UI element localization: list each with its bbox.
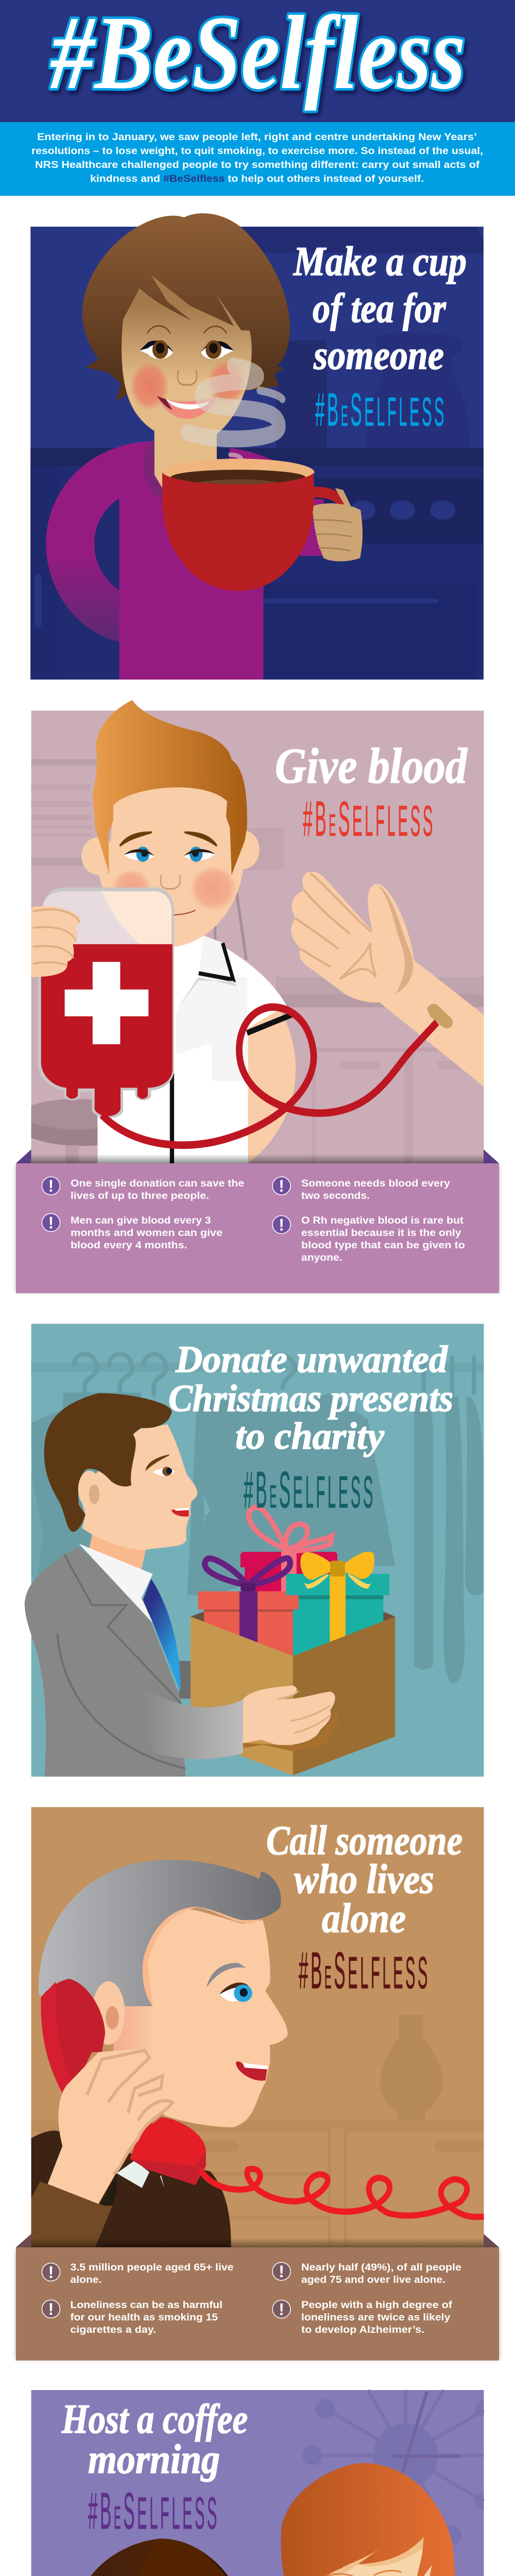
fact: Someone needs blood every xyxy=(301,1178,450,1189)
heading: someone xyxy=(313,333,444,378)
icon: alert xyxy=(272,2262,290,2281)
heading xyxy=(61,2397,248,2482)
fact: O Rh negative blood is rare but xyxy=(301,1215,464,1226)
icon: alert xyxy=(42,1177,60,1195)
heading: to charity xyxy=(235,1415,385,1458)
fact: One single donation can save the xyxy=(71,1178,244,1189)
fact: months and women can give xyxy=(71,1227,222,1239)
heading: Christmas presents xyxy=(168,1378,453,1420)
panel: donate presents xyxy=(25,1324,484,1776)
panel: coffee morning xyxy=(0,2390,492,2576)
fact xyxy=(301,1178,450,1201)
fact: People with a high degree of xyxy=(301,2299,453,2311)
heading xyxy=(293,239,467,378)
fact: Men can give blood every 3 xyxy=(71,1215,211,1226)
heading: who lives xyxy=(294,1857,434,1902)
fact xyxy=(71,1178,244,1201)
fact: aged 75 and over live alone. xyxy=(301,2274,445,2285)
intro text: Entering in to January, we saw people left, right and centre undertaking New Years’ xyxy=(37,131,477,143)
icon: alert: ! xyxy=(279,1216,284,1234)
panel: coffee morning: #BESELFLESS xyxy=(88,2482,219,2540)
illustration: nurse with blood bag xyxy=(31,700,484,1163)
fact: blood type that can be given to xyxy=(301,1240,465,1251)
fact: Nearly half (49%), of all people xyxy=(301,2262,461,2273)
heading: Call someone xyxy=(266,1818,462,1863)
fact: blood every 4 months. xyxy=(71,1240,187,1251)
fact xyxy=(301,1215,465,1263)
heading xyxy=(266,1818,462,1941)
heading: alone xyxy=(322,1896,406,1941)
fold corners and shadow xyxy=(16,2234,499,2360)
intro text: NRS Healthcare challenged people to try something different: carry out small acts of xyxy=(35,159,480,171)
heading: Make a cup xyxy=(293,239,467,284)
icon: alert xyxy=(272,1216,290,1234)
intro text: resolutions – to lose weight, to quit smoking, to exercise more. So instead of the usual, xyxy=(31,145,483,157)
heading xyxy=(168,1338,453,1458)
panel: make a cup of tea xyxy=(30,213,484,680)
heading: Host a coffee xyxy=(61,2397,248,2442)
fact: alone. xyxy=(70,2274,102,2285)
intro text: kindness and #BeSelfless to help out others instead of yourself. xyxy=(90,173,424,184)
illustration: man on red telephone xyxy=(31,1807,484,2247)
fact: loneliness are twice as likely xyxy=(301,2312,451,2323)
icon: alert: ! xyxy=(279,2262,284,2281)
fact: two seconds. xyxy=(301,1190,370,1201)
intro text xyxy=(31,131,483,184)
heading: morning xyxy=(88,2437,220,2482)
fact: 3.5 million people aged 65+ live xyxy=(70,2262,234,2273)
icon: alert xyxy=(42,2263,60,2281)
icon: alert: ! xyxy=(48,1177,54,1195)
fact: for our health as smoking 15 xyxy=(70,2312,218,2323)
fact: essential because it is the only xyxy=(301,1227,461,1239)
fact xyxy=(70,2299,222,2335)
icon: alert xyxy=(272,2300,290,2318)
fact: anyone. xyxy=(301,1252,342,1263)
heading: Give blood xyxy=(275,738,468,794)
fact xyxy=(71,1215,222,1251)
panel: call someone xyxy=(16,1807,499,2361)
fold corners and shadow xyxy=(16,1149,499,1292)
intro band xyxy=(0,122,515,196)
heading: of tea for xyxy=(313,286,447,331)
icon: alert xyxy=(42,2300,60,2318)
fact xyxy=(70,2262,234,2285)
fact: cigarettes a day. xyxy=(70,2324,156,2335)
fact: Loneliness can be as harmful xyxy=(70,2299,222,2311)
icon: alert: ! xyxy=(279,2300,284,2318)
fact xyxy=(301,2299,453,2335)
panel: give blood xyxy=(16,700,499,1293)
icon: alert xyxy=(272,1177,290,1195)
icon: alert: ! xyxy=(48,2263,54,2281)
icon: alert: ! xyxy=(48,1214,54,1232)
illustration: two women with coffee xyxy=(0,2390,492,2576)
icon: alert: ! xyxy=(279,1177,284,1195)
header band xyxy=(0,0,515,122)
fact xyxy=(301,2262,461,2285)
illustration: woman with tea xyxy=(30,213,484,680)
icon: alert: ! xyxy=(48,2300,54,2318)
fact: lives of up to three people. xyxy=(71,1190,209,1201)
heading: Donate unwanted xyxy=(175,1338,448,1381)
info box xyxy=(16,2247,499,2361)
fact: to develop Alzheimer’s. xyxy=(301,2324,424,2335)
icon: alert xyxy=(42,1214,60,1232)
illustration: man with gift box xyxy=(25,1324,484,1776)
info box xyxy=(16,1163,499,1293)
